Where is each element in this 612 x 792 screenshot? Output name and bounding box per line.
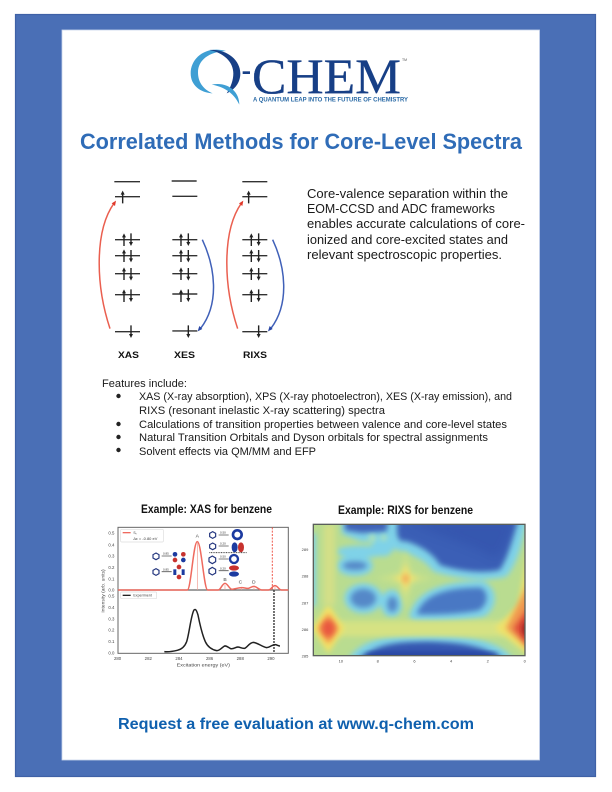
arrow: red excitation xyxy=(99,201,116,329)
footer call to action: Request a free evaluation at www.q-chem.com xyxy=(118,716,474,733)
chart: XAS spectrum xyxy=(101,527,288,667)
heatmap x ticks: 8 xyxy=(377,659,380,664)
x axis ticks xyxy=(114,656,275,661)
orbital insets: right stack: 0.50 xyxy=(220,555,226,559)
heatmap x ticks xyxy=(339,659,527,664)
logo: Q-Chem xyxy=(191,48,408,105)
logo wordmark: CHEM xyxy=(252,48,401,104)
features list: Calculations of transition properties between valence and core-level states xyxy=(139,419,507,431)
chart: RIXS heatmap xyxy=(302,517,531,664)
features list: RIXS (resonant inelastic X-ray scattering) spectra xyxy=(139,405,386,417)
orbital insets: right stack: 0.20 xyxy=(220,542,226,546)
x axis ticks: 284 xyxy=(175,656,183,661)
dashed markers xyxy=(271,527,274,590)
arrow: red excitation xyxy=(227,201,243,329)
x axis label: Excitation energy (eV) xyxy=(177,662,231,667)
orbital insets: left pair: 0.85 xyxy=(163,552,169,556)
energy level diagrams xyxy=(99,181,284,338)
heatmap x ticks: 6 xyxy=(413,659,416,664)
arrow: blue emission xyxy=(198,240,214,331)
orbital insets: right stack: 0.20 xyxy=(220,566,226,570)
label: XAS: XAS xyxy=(118,350,139,360)
calculated red spectrum xyxy=(118,542,288,590)
legend: experiment xyxy=(121,592,157,599)
heading: RIXS example: Example: RIXS for benzene xyxy=(338,505,473,517)
x axis ticks: 286 xyxy=(206,656,214,661)
legend: calculated xyxy=(121,529,163,542)
heatmap x ticks: 4 xyxy=(450,659,453,664)
features list: XAS (X-ray absorption), XPS (X-ray photoelectron), XES (X-ray emission), and xyxy=(139,391,512,403)
white content panel xyxy=(62,30,540,760)
diagram: RIXS xyxy=(227,182,284,338)
intro paragraph: Core-valence separation within the xyxy=(307,186,508,201)
legend: calculated: S₀ xyxy=(133,531,138,535)
y axis ticks: 0.2 xyxy=(108,565,115,570)
y axis ticks: 0.1 xyxy=(108,576,115,581)
peak labels xyxy=(196,534,256,585)
legend: calculated: Δε = -0.80 eV xyxy=(133,536,158,541)
logo mark: Q ring xyxy=(191,50,250,105)
orbital insets: left pair: 0.85 xyxy=(163,567,169,571)
darker top band xyxy=(446,528,504,549)
light spots xyxy=(369,535,387,542)
experimental black spectrum xyxy=(164,609,280,652)
features heading: Features include: xyxy=(102,378,187,390)
heading: XAS example: Example: XAS for benzene xyxy=(141,504,272,516)
left hot spot xyxy=(312,603,344,653)
y axis ticks: 0.3 xyxy=(108,616,115,621)
y axis ticks: 0.4 xyxy=(108,605,115,610)
orbital insets: right stack: 0.50 xyxy=(220,531,226,535)
y axis ticks: 0.5 xyxy=(108,530,115,535)
y axis ticks: 0.5 xyxy=(108,594,115,599)
heatmap x ticks: 2 xyxy=(487,659,490,664)
features list: Solvent effects via QM/MM and EFP xyxy=(139,446,316,458)
heatmap y ticks xyxy=(302,547,309,658)
peak labels: A xyxy=(196,534,200,540)
legend: experiment: Experiment xyxy=(133,594,152,598)
stick lines xyxy=(197,542,275,590)
trademark: TM xyxy=(402,58,407,62)
x axis ticks: 290 xyxy=(267,656,275,661)
intro paragraph: relevant spectroscopic properties. xyxy=(307,247,502,262)
features list: Natural Transition Orbitals and Dyson orbitals for spectral assignments xyxy=(139,432,488,444)
heatmap y ticks: 286 xyxy=(302,627,309,632)
y axis ticks: 0.3 xyxy=(108,554,115,559)
left vertical stripe xyxy=(324,525,335,605)
label: RIXS: RIXS xyxy=(243,350,267,360)
x axis ticks: 288 xyxy=(237,656,244,661)
peak labels: C xyxy=(239,579,243,585)
deep blue regions xyxy=(343,517,519,663)
heatmap frame xyxy=(313,524,525,656)
cyan halos xyxy=(314,525,524,655)
x axis ticks: 280 xyxy=(114,656,122,661)
y axis ticks: 0.4 xyxy=(108,542,115,547)
central horizontal band xyxy=(335,621,505,636)
features list xyxy=(102,378,512,458)
y axis ticks: 0.1 xyxy=(108,639,115,644)
intro paragraph xyxy=(307,186,525,262)
diagram: XES xyxy=(172,181,214,338)
heatmap y ticks: 289 xyxy=(302,547,309,552)
heatmap x ticks: 0 xyxy=(524,659,527,664)
central bright diamond xyxy=(384,550,425,606)
logo tagline: A QUANTUM LEAP INTO THE FUTURE OF CHEMISTRY xyxy=(253,98,408,104)
y axis label: Intensity (arb. units) xyxy=(101,569,106,613)
plot frame xyxy=(118,527,288,653)
y axis ticks xyxy=(108,530,115,655)
y axis ticks: 0.2 xyxy=(108,628,115,633)
intro paragraph: enables accurate calculations of core- xyxy=(307,216,525,231)
heatmap field xyxy=(314,525,524,655)
diagram: XAS xyxy=(99,182,140,338)
y axis ticks: 0.0 xyxy=(108,588,115,593)
heatmap y ticks: 288 xyxy=(302,574,309,579)
label: XES: XES xyxy=(174,350,195,360)
arrow: blue emission xyxy=(268,240,284,331)
orbital insets: left pair xyxy=(153,552,186,579)
heatmap y ticks: 285 xyxy=(302,653,309,658)
heatmap x ticks: 10 xyxy=(339,659,344,664)
peak labels: D xyxy=(252,579,256,585)
intro paragraph: ionized and core-excited states and xyxy=(307,232,508,247)
orbital insets: right stack xyxy=(209,530,247,577)
heatmap y ticks: 287 xyxy=(302,600,309,605)
x axis ticks: 282 xyxy=(145,656,152,661)
title: Correlated Methods for Core-Level Spectra xyxy=(80,129,523,154)
y axis ticks: 0.0 xyxy=(108,650,115,655)
right hot edge xyxy=(496,556,524,655)
peak labels: B xyxy=(223,577,227,583)
intro paragraph: EOM-CCSD and ADC frameworks xyxy=(307,201,495,216)
